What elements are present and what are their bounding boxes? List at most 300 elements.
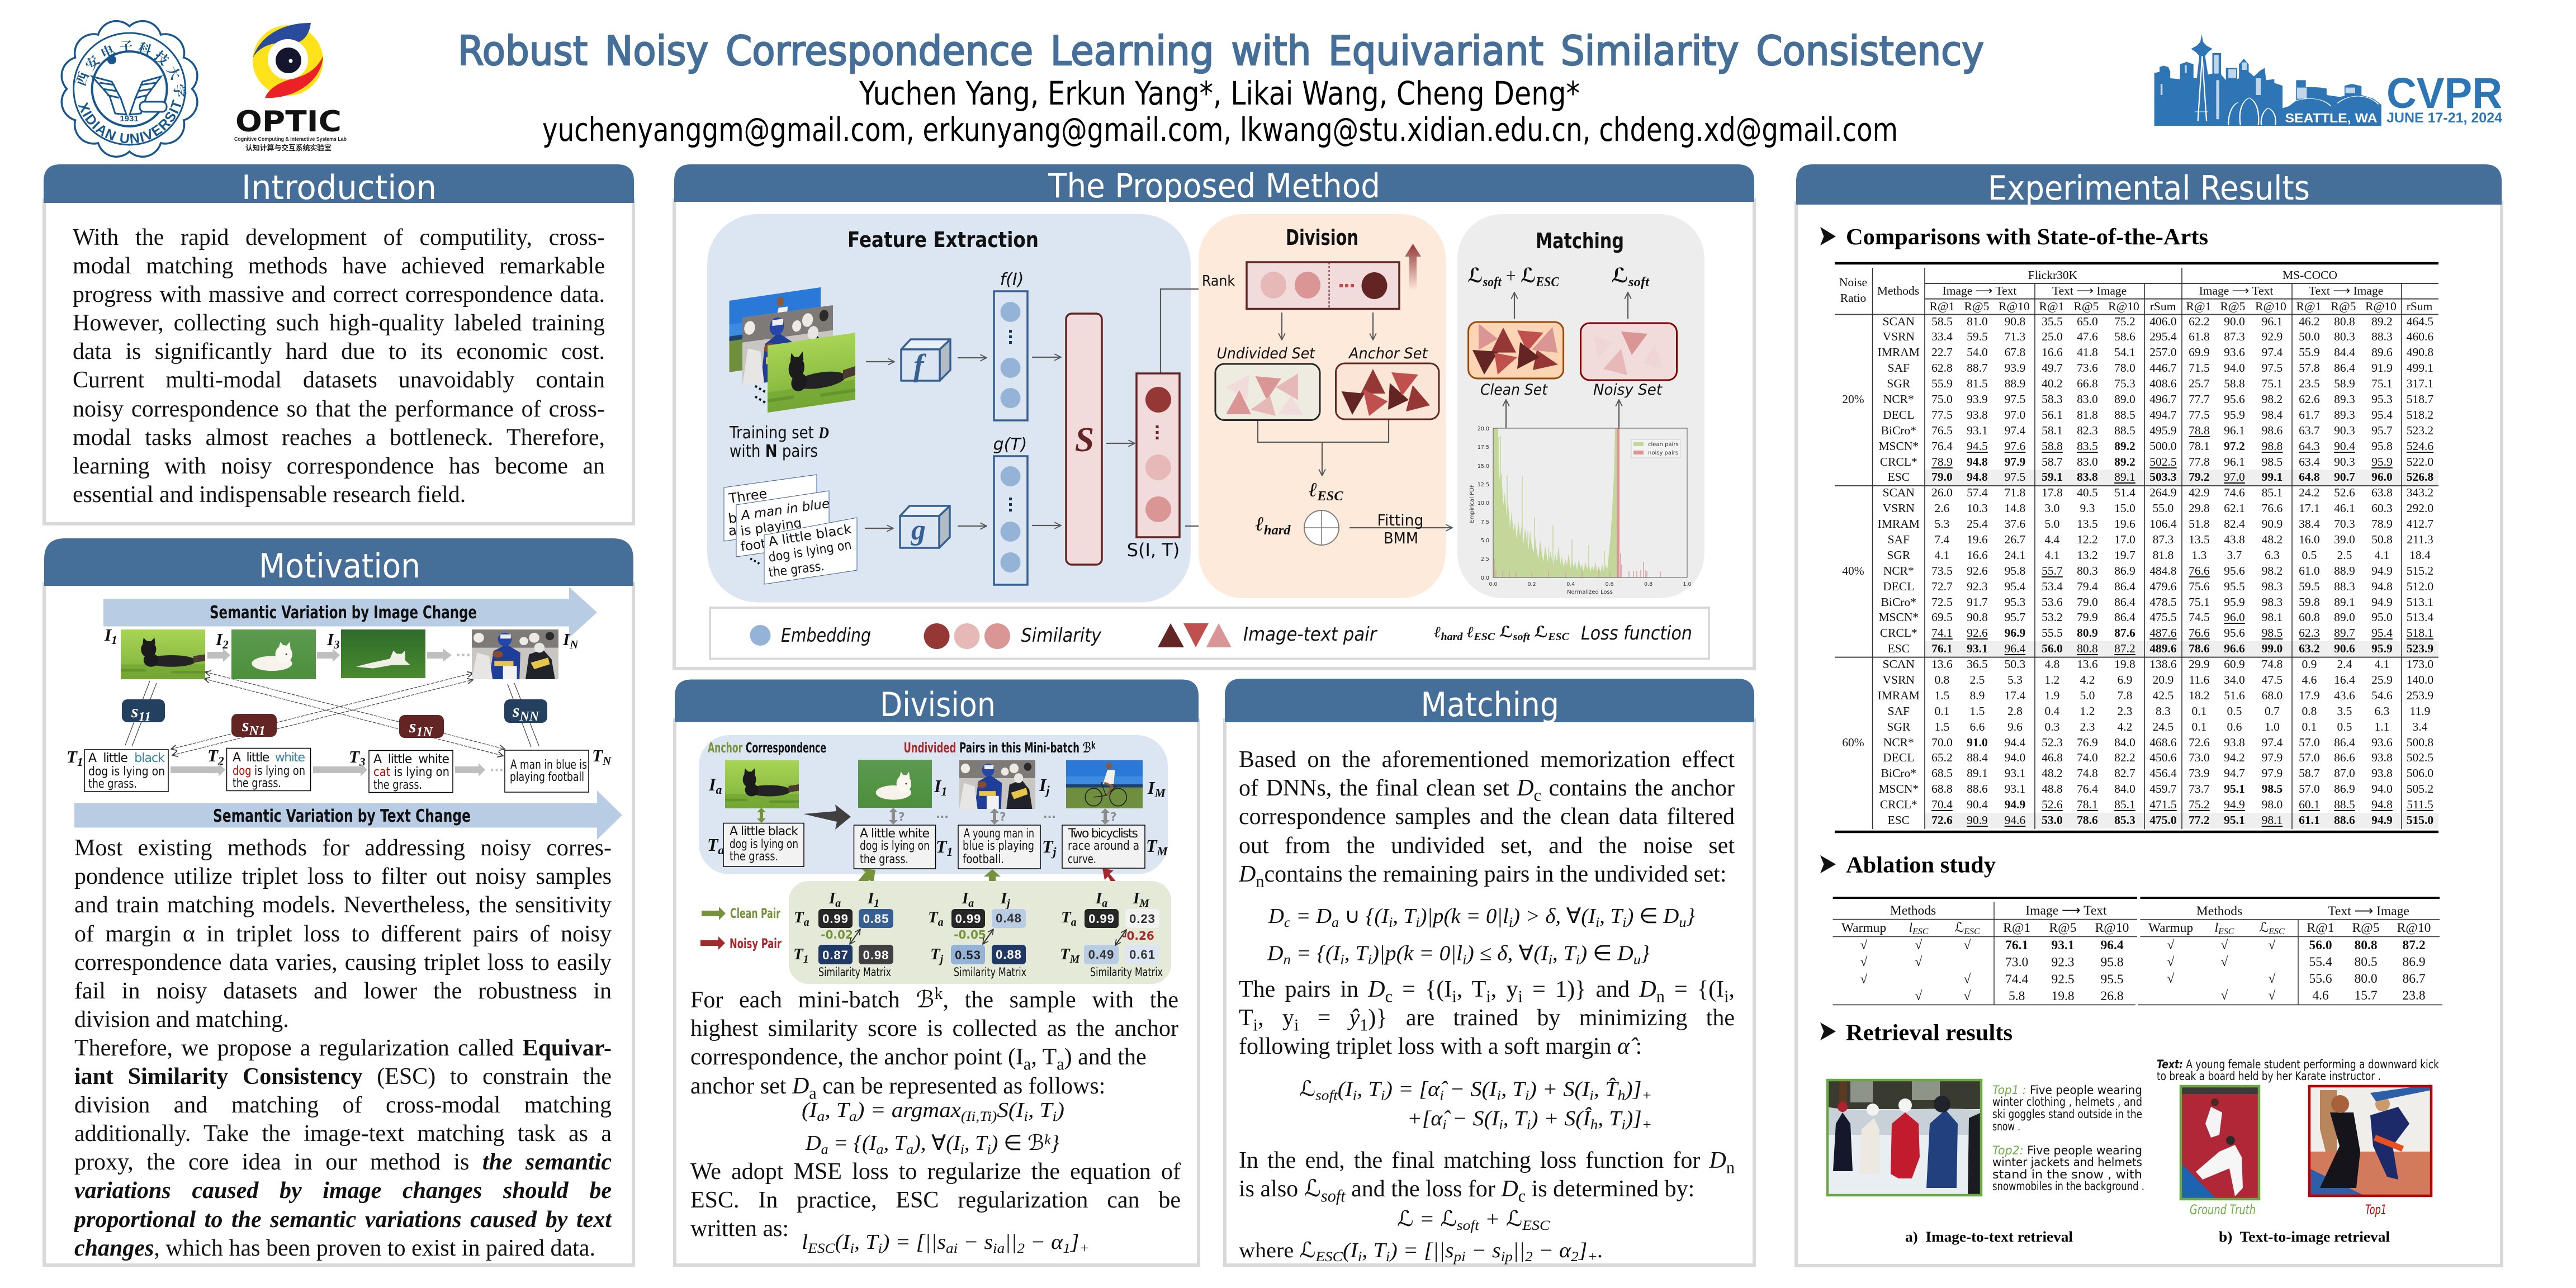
- table: comparison with state of the art: 95.9: [2371, 642, 2393, 655]
- table: ablation study: 19.8: [2051, 989, 2075, 1003]
- equation: anchor point: (Ia, Ta) = argmax (Ii,Ti)S(Ii, Ti): [802, 1098, 1064, 1124]
- table: comparison with state of the art: 93.6: [2371, 736, 2393, 749]
- table: comparison with state of the art: 60.8: [2299, 610, 2320, 624]
- table: comparison with state of the art: 518.1: [2407, 626, 2433, 640]
- table: comparison with state of the art: ESC: [1888, 642, 1910, 655]
- table: comparison with state of the art: 526.8: [2407, 470, 2433, 484]
- text: introduction body: essential and indispensable research field.: [73, 482, 466, 508]
- table: comparison with state of the art: 18.4: [2409, 548, 2431, 562]
- table: comparison with state of the art: 95.1: [2224, 782, 2245, 795]
- table: ablation study: 86.7: [2402, 972, 2426, 986]
- table: comparison with state of the art: 58.5: [1931, 314, 1953, 328]
- pair labels: T1: [936, 836, 953, 859]
- table: comparison with state of the art: 58.3: [2042, 392, 2063, 406]
- table: comparison with state of the art: 58.8: [2224, 377, 2245, 390]
- table: comparison with state of the art: 0.8: [2302, 704, 2317, 718]
- title: Robust Noisy Correspondence Learning with Equivariant Similarity Consistency: [458, 27, 1984, 74]
- table: ablation study: 80.8: [2354, 938, 2378, 953]
- text: matching body 1: Dncontains the remaining pairs in the undivided set:: [1239, 861, 1726, 891]
- query text: to break a board held by her Karate instructor .: [2157, 1069, 2381, 1083]
- table: comparison with state of the art: 26.7: [2005, 533, 2025, 546]
- table: comparison with state of the art: 76.6: [2262, 501, 2283, 515]
- table: comparison with state of the art: 51.6: [2224, 689, 2245, 702]
- text: division body 1: [690, 986, 1178, 1101]
- table: comparison with state of the art: 92.3: [1967, 580, 1988, 593]
- table: comparison with state of the art: 96.0: [2224, 610, 2245, 624]
- table: comparison with state of the art: 138.6: [2149, 657, 2177, 671]
- table: comparison with state of the art: 98.1: [2262, 813, 2283, 827]
- badges: similarity scores: [122, 699, 547, 740]
- matrix 3: 0.99: [1088, 912, 1115, 926]
- text boxes row: A little white: [373, 752, 449, 766]
- table: comparison with state of the art: 60.3: [2371, 501, 2393, 515]
- table: comparison with state of the art: 90.9: [2262, 517, 2283, 531]
- table: comparison with state of the art: 65.0: [2077, 314, 2098, 328]
- matrix 3: Similarity Matrix: [1090, 965, 1163, 979]
- table: ablation study: 95.8: [2100, 955, 2124, 969]
- table: comparison with state of the art: 94.4: [2005, 736, 2025, 749]
- arrow: semantic variation by text change: Semantic Variation by Text Change: [213, 806, 471, 826]
- table: comparison with state of the art: 97.4: [2262, 345, 2283, 359]
- table: comparison with state of the art: 97.9: [2005, 455, 2025, 468]
- table: comparison with state of the art: 8.9: [1970, 689, 1985, 702]
- table: comparison with state of the art: 93.8: [2371, 766, 2393, 780]
- table: comparison with state of the art: 65.2: [1931, 751, 1953, 764]
- table: comparison with state of the art: 496.7: [2149, 392, 2177, 406]
- table: comparison with state of the art: CRCL*: [1880, 626, 1917, 640]
- table: comparison with state of the art: 76.5: [1931, 424, 1953, 437]
- captions: top retrieved texts: Top1 : Five people wearing: [1992, 1083, 2142, 1097]
- sub-panel: Division: Anchor Set: [1348, 345, 1428, 362]
- table: comparison with state of the art: 78.0: [2114, 361, 2135, 375]
- table: ablation study: 92.3: [2051, 955, 2075, 969]
- captions: top retrieved texts: ski goggles stand outside in the: [1992, 1107, 2142, 1121]
- sub-panel: Division: Rank: [1202, 273, 1235, 290]
- table: comparison with state of the art: 97.6: [2005, 439, 2025, 453]
- table: comparison with state of the art: DECL: [1883, 751, 1914, 764]
- table: comparison with state of the art: 74.1: [1931, 626, 1953, 640]
- caption boxes: [723, 823, 1145, 869]
- text boxes row: the grass.: [233, 776, 281, 790]
- text boxes row: T3: [349, 747, 365, 769]
- table: comparison with state of the art: 446.7: [2149, 361, 2177, 375]
- table: comparison with state of the art: 6.3: [2375, 704, 2389, 718]
- matrix 2: -0.05: [954, 928, 986, 941]
- table: comparison with state of the art: 81.0: [1967, 314, 1988, 328]
- arrow: anchor to undivided: [803, 804, 851, 830]
- encoder: g: [900, 506, 950, 548]
- table: comparison with state of the art: 5.3: [1935, 517, 1949, 531]
- table: comparison with state of the art: 523.2: [2407, 424, 2433, 437]
- table: comparison with state of the art: 1.1: [2375, 720, 2389, 733]
- table: comparison with state of the art: 78.1: [2189, 439, 2210, 453]
- table: comparison with state of the art: 97.4: [2005, 424, 2025, 437]
- table: comparison with state of the art: 75.6: [2189, 580, 2210, 593]
- table: comparison with state of the art: 79.2: [2189, 470, 2210, 484]
- table: comparison with state of the art: 95.9: [2224, 408, 2245, 422]
- table: comparison with state of the art: SAF: [1888, 361, 1910, 375]
- table: comparison with state of the art: 97.5: [2262, 361, 2283, 375]
- text stack: training captions: the grass.: [768, 559, 825, 580]
- table: comparison with state of the art: 412.7: [2407, 517, 2433, 531]
- table: comparison with state of the art: 62.2: [2189, 314, 2210, 328]
- table: comparison with state of the art: 81.5: [1967, 377, 1988, 390]
- table: ablation study: 80.5: [2354, 955, 2378, 969]
- captions: top retrieved texts: stand in the snow , with: [1992, 1168, 2142, 1181]
- chart: loss histogram: 0.0: [1481, 575, 1489, 581]
- matrix 1: [793, 889, 893, 979]
- table: comparison with state of the art: 3.5: [2337, 704, 2352, 718]
- table: comparison with state of the art: 499.1: [2407, 361, 2433, 375]
- table: comparison with state of the art: Text ⟶ Image: [2052, 284, 2127, 297]
- table: comparison with state of the art: VSRN: [1883, 501, 1915, 515]
- table: comparison with state of the art: 98.2: [2262, 564, 2283, 577]
- table: comparison with state of the art: 62.1: [2224, 501, 2245, 515]
- chart: loss histogram: 0.4: [1566, 581, 1575, 588]
- chart: loss histogram: 20.0: [1478, 426, 1489, 432]
- matrix 2: Similarity Matrix: [954, 965, 1026, 979]
- text boxes row: playing football: [510, 770, 584, 784]
- text: matching body 2: [1239, 976, 1735, 1063]
- table: ablation study: 86.9: [2402, 955, 2426, 969]
- table: comparison with state of the art: 471.5: [2149, 798, 2177, 811]
- table: comparison with state of the art: 95.5: [2224, 580, 2245, 593]
- table: comparison with state of the art: 83.8: [2077, 470, 2098, 484]
- table: comparison with state of the art: 43.6: [2334, 689, 2355, 702]
- table: comparison with state of the art: 29.9: [2189, 657, 2210, 671]
- table: comparison with state of the art: 96.9: [2005, 626, 2025, 640]
- matrix 2: Tj: [930, 945, 944, 965]
- captions: top retrieved texts: winter clothing , helmets , and: [1992, 1095, 2142, 1109]
- table: ablation study: √: [1860, 972, 1868, 987]
- table: comparison with state of the art: 4.4: [2045, 533, 2059, 546]
- table: comparison with state of the art: 89.0: [2334, 610, 2355, 624]
- table: comparison with state of the art: 86.4: [2114, 610, 2135, 624]
- table: comparison with state of the art: DECL: [1883, 408, 1914, 422]
- table: ablation study: R@5: [2049, 921, 2077, 935]
- table: comparison with state of the art: 86.4: [2334, 361, 2355, 375]
- table: comparison with state of the art: 71.5: [2189, 361, 2210, 375]
- table: comparison with state of the art: 91.9: [2371, 361, 2393, 375]
- embedding column: f(I): f(I): [1000, 270, 1024, 290]
- table: comparison with state of the art: 15.0: [2114, 501, 2135, 515]
- table: comparison with state of the art: 86.9: [2334, 782, 2355, 795]
- table: comparison with state of the art: 515.0: [2407, 813, 2433, 827]
- table: comparison with state of the art: 460.6: [2407, 330, 2433, 343]
- table: comparison with state of the art: 10.3: [1967, 501, 1988, 515]
- table: comparison with state of the art: 524.6: [2407, 439, 2433, 453]
- table: ablation study: Warmup: [1841, 921, 1886, 935]
- image row: I3: [326, 629, 340, 651]
- table: comparison with state of the art: [1835, 263, 2438, 832]
- text: introduction body: noisy correspondence so that the performance of cross-: [73, 396, 605, 422]
- heading: Introduction: Introduction: [242, 168, 437, 207]
- chart: loss histogram: Normalized Loss: [1567, 589, 1613, 595]
- table: comparison with state of the art: 75.2: [2114, 314, 2135, 328]
- table: comparison with state of the art: 33.4: [1931, 330, 1953, 343]
- table: comparison with state of the art: 57.8: [2299, 361, 2320, 375]
- photo: ground truth: Ground Truth: [2190, 1202, 2256, 1218]
- table: comparison with state of the art: 72.7: [1931, 580, 1953, 593]
- table: ablation study: 23.8: [2402, 988, 2426, 1003]
- text: matching body 1: of DNNs, the final clean set Dc contains the anchor: [1239, 775, 1735, 805]
- legend: loss function: ℓhard ℓESC ℒsoft ℒESC: [1433, 624, 1569, 643]
- pair labels: Tj: [1042, 836, 1057, 859]
- sub-panel: Division: BMM: [1384, 529, 1418, 547]
- table: comparison with state of the art: 52.3: [2042, 736, 2063, 749]
- table: comparison with state of the art: 98.3: [2262, 580, 2283, 593]
- text: introduction body: However, collecting such high-quality labeled training: [73, 310, 605, 336]
- legend: loss function: [1433, 622, 1692, 645]
- table: comparison with state of the art: 22.7: [1931, 345, 1953, 359]
- table: comparison with state of the art: 88.7: [1967, 361, 1988, 375]
- matrix 1: 0.98: [863, 948, 889, 962]
- table: comparison with state of the art: R@10: [2108, 300, 2139, 313]
- table: comparison with state of the art: 264.9: [2149, 486, 2177, 499]
- table: ablation study: √: [2269, 988, 2276, 1003]
- table: comparison with state of the art: 78.8: [2189, 424, 2210, 437]
- table: ablation study: √: [2167, 972, 2175, 986]
- text boxes row: the grass.: [373, 778, 422, 792]
- caption boxes: race around a: [1068, 839, 1139, 853]
- table: comparison with state of the art: 57.0: [2299, 751, 2320, 764]
- matrix 1: I1: [867, 889, 879, 910]
- table: comparison with state of the art: 18.2: [2189, 689, 2210, 702]
- table: ablation study: √: [1964, 989, 1971, 1003]
- table: comparison with state of the art: 98.4: [2262, 408, 2283, 422]
- matrix 2: 0.99: [955, 912, 981, 926]
- table: comparison with state of the art: 95.6: [2224, 626, 2245, 640]
- legend: embedding: Embedding: [781, 624, 871, 647]
- logo: Xidian University: 1931: [120, 114, 139, 124]
- table: comparison with state of the art: 95.4: [2371, 626, 2393, 640]
- table: ablation study: lESC: [1909, 921, 1929, 936]
- text: matching body 1: Based on the aforementioned memorization effect: [1239, 747, 1735, 773]
- table: comparison with state of the art: 489.6: [2149, 642, 2177, 655]
- table: comparison with state of the art: 92.9: [2262, 330, 2283, 343]
- image stack: training images: ···: [750, 380, 769, 399]
- table: comparison with state of the art: 16.0: [2299, 533, 2320, 546]
- equation: anchor set: Da = {(Ia, Ta), ∀(Ii, Ti) ∈ ℬk}: [805, 1131, 1059, 1157]
- equation: clean set: Dc = Da ∪ {(Ii, Ti)|p(k = 0|li) > δ, ∀(Ii, Ti) ∈ Du}: [1268, 905, 1695, 930]
- table: comparison with state of the art: 80.3: [2077, 564, 2098, 577]
- table: comparison with state of the art: R@1: [2186, 300, 2211, 313]
- table: comparison with state of the art: 48.2: [2262, 533, 2283, 546]
- table: comparison with state of the art: 89.7: [2334, 626, 2355, 640]
- table: comparison with state of the art: R@1: [1930, 300, 1954, 313]
- table: comparison with state of the art: 257.0: [2149, 345, 2177, 359]
- table: comparison with state of the art: 68.0: [2262, 689, 2283, 702]
- table: comparison with state of the art: 57.0: [2299, 782, 2320, 795]
- table: comparison with state of the art: 55.7: [2042, 564, 2063, 577]
- table: comparison with state of the art: 94.8: [2371, 580, 2393, 593]
- table: comparison with state of the art: 92.6: [1967, 626, 1988, 640]
- table: ablation study: √: [2167, 955, 2175, 969]
- table: comparison with state of the art: 93.9: [2005, 361, 2025, 375]
- captions: top retrieved texts: Top2: Five people wearing: [1992, 1144, 2142, 1157]
- table: comparison with state of the art: 88.3: [2334, 580, 2355, 593]
- table: comparison with state of the art: 79.0: [1931, 470, 1953, 484]
- table: comparison with state of the art: 98.1: [2262, 610, 2283, 624]
- table: comparison with state of the art: Image ⟶ Text: [2199, 284, 2273, 297]
- table: ablation study: Methods: [2196, 904, 2242, 918]
- encoder: f: [901, 339, 950, 383]
- table: comparison with state of the art: 11.9: [2410, 704, 2430, 718]
- diagram: anchor and undivided pairs: Undivided Pairs in this Mini-batch ℬk: [903, 740, 1096, 756]
- table: comparison with state of the art: 513.4: [2407, 610, 2433, 624]
- table: ablation study: √: [2269, 938, 2276, 953]
- table: comparison with state of the art: 86.6: [2334, 751, 2355, 764]
- table: comparison with state of the art: 59.1: [2042, 470, 2063, 484]
- table: ablation study: √: [1915, 938, 1922, 953]
- table: comparison with state of the art: 62.6: [2299, 392, 2320, 406]
- table: comparison with state of the art: 46.2: [2299, 314, 2320, 328]
- table: ablation study: √: [1964, 938, 1971, 953]
- table: comparison with state of the art: 77.5: [1931, 408, 1953, 422]
- diagram: similarity matrices: [789, 881, 1171, 984]
- table: comparison with state of the art: 89.2: [2371, 314, 2393, 328]
- pair labels: [707, 774, 1168, 859]
- table: comparison with state of the art: 60.1: [2299, 798, 2320, 811]
- table: comparison with state of the art: 20%: [1842, 392, 1864, 406]
- table: comparison with state of the art: 54.1: [2114, 345, 2135, 359]
- table: comparison with state of the art: 75.1: [2189, 595, 2210, 609]
- table: comparison with state of the art: 82.3: [2077, 424, 2098, 437]
- caption boxes: A little white: [860, 827, 930, 841]
- table: comparison with state of the art: 50.3: [2005, 657, 2025, 671]
- table: comparison with state of the art: 513.1: [2407, 595, 2433, 609]
- table: comparison with state of the art: CRCL*: [1880, 798, 1917, 811]
- legend: similarity: [924, 623, 1102, 649]
- text: introduction body: modal tasks almost reaches a bottleneck. Therefore,: [73, 425, 605, 451]
- text: introduction body: data is significantly hard due to its economic cost.: [73, 339, 605, 364]
- text boxes row: the grass.: [88, 777, 137, 791]
- table: comparison with state of the art: 63.2: [2299, 642, 2320, 655]
- panel: Experimental Results: [1796, 164, 2502, 1266]
- noisy set: [1581, 323, 1677, 399]
- table: comparison with state of the art: 80.8: [2334, 314, 2355, 328]
- table: comparison with state of the art: 77.7: [2189, 392, 2210, 406]
- table: comparison with state of the art: 87.2: [2114, 642, 2135, 655]
- table: comparison with state of the art: 502.5: [2149, 455, 2177, 468]
- table: comparison with state of the art: 5.0: [2045, 517, 2059, 531]
- caption: text-to-image: b) Text-to-image retrieval: [2219, 1229, 2390, 1245]
- table: comparison with state of the art: 62.8: [1931, 361, 1953, 375]
- table: comparison with state of the art: 88.5: [2334, 798, 2355, 811]
- table: comparison with state of the art: IMRAM: [1878, 517, 1920, 531]
- table: comparison with state of the art: 96.1: [2224, 424, 2245, 437]
- table: comparison with state of the art: 76.4: [1931, 439, 1953, 453]
- table: comparison with state of the art: 98.2: [2262, 392, 2283, 406]
- badges: similarity scores: s1N: [409, 716, 433, 740]
- table: comparison with state of the art: Ratio: [1840, 291, 1866, 305]
- caption boxes: A young man in: [964, 827, 1034, 841]
- text: motivation body: fail in noisy datasets and lower the robustness in: [74, 978, 612, 1004]
- table: comparison with state of the art: 74.5: [2189, 610, 2210, 624]
- table: comparison with state of the art: 13.2: [2077, 548, 2098, 562]
- table: comparison with state of the art: 50.8: [2371, 533, 2393, 546]
- arrow: semantic variation by image change: [103, 587, 597, 638]
- table: comparison with state of the art: 60%: [1842, 736, 1864, 749]
- text boxes row: T2: [207, 746, 224, 768]
- table: comparison with state of the art: R@5: [1964, 300, 1989, 313]
- table: comparison with state of the art: SCAN: [1883, 314, 1915, 328]
- image row: IN: [562, 629, 579, 651]
- table: ablation study: R@1: [2003, 921, 2030, 935]
- table: ablation study: R@1: [2307, 921, 2334, 935]
- caption boxes: Two bicyclists: [1068, 827, 1138, 841]
- image row: I2: [215, 629, 229, 651]
- table: comparison with state of the art: 76.9: [2077, 736, 2098, 749]
- table: comparison with state of the art: 343.2: [2407, 486, 2433, 499]
- table: comparison with state of the art: 47.5: [2262, 673, 2283, 686]
- table: comparison with state of the art: 518.2: [2407, 408, 2433, 422]
- matrix 1: Ia: [828, 889, 841, 910]
- table: comparison with state of the art: 0.5: [2227, 704, 2242, 718]
- table: comparison with state of the art: 29.8: [2189, 501, 2210, 515]
- arrow: semantic variation by text change: [74, 790, 622, 840]
- table: ablation study: 73.0: [2005, 955, 2028, 969]
- table: comparison with state of the art: 89.2: [2114, 439, 2135, 453]
- table: comparison with state of the art: 88.5: [2114, 424, 2135, 437]
- legend: clean and noisy pair: Noisy Pair: [730, 936, 782, 951]
- text boxes row: T1: [67, 747, 83, 769]
- table: comparison with state of the art: 95.0: [2371, 610, 2393, 624]
- chart: loss histogram: 0.8: [1644, 581, 1652, 588]
- caption boxes: dog is lying on: [730, 837, 798, 851]
- table: comparison with state of the art: 89.6: [2371, 345, 2393, 359]
- table: comparison with state of the art: 85.1: [2114, 798, 2135, 811]
- logo: OPTIC lab: [234, 23, 347, 152]
- text stack: training captions: foot: [740, 537, 767, 555]
- table: comparison with state of the art: 56.0: [2042, 642, 2063, 655]
- table: comparison with state of the art: 85.1: [2262, 486, 2283, 499]
- chart: loss histogram: 12.5: [1478, 482, 1489, 488]
- text: matching body 1: [1239, 746, 1735, 891]
- sub-panel: Feature Extraction: Training set D: [729, 423, 829, 443]
- sub-panel: Feature Extraction: Feature Extraction: [847, 228, 1039, 252]
- embedding column: f(I): [994, 270, 1027, 420]
- table: comparison with state of the art: Methods: [1877, 284, 1919, 297]
- text: matching body 3: In the end, the final matching loss function for Dn: [1239, 1148, 1735, 1177]
- table: comparison with state of the art: 78.9: [2371, 517, 2393, 531]
- table: comparison with state of the art: 73.7: [2189, 782, 2210, 795]
- image row: ···: [456, 647, 471, 663]
- table: comparison with state of the art: 487.6: [2149, 626, 2177, 640]
- table: comparison with state of the art: 63.8: [2371, 486, 2393, 499]
- table: comparison with state of the art: 99.0: [2262, 642, 2283, 655]
- table: comparison with state of the art: MSCN*: [1878, 439, 1919, 453]
- arrow: semantic variation by image change: Semantic Variation by Image Change: [210, 603, 477, 623]
- text: motivation body: Most existing methods for addressing noisy corres-: [74, 835, 612, 861]
- table: ablation study: Methods: [1890, 903, 1936, 918]
- sub-panel: Division: Division: [1286, 225, 1358, 250]
- table: comparison with state of the art: 24.5: [2153, 720, 2174, 733]
- legend: image-text pair: [1158, 623, 1377, 647]
- text: motivation body: division and matching.: [74, 1007, 289, 1033]
- table: ablation study: Text ⟶ Image: [2328, 904, 2409, 918]
- table: comparison with state of the art: 97.9: [2262, 766, 2283, 780]
- table: comparison with state of the art: 4.1: [2375, 657, 2389, 671]
- table: ablation study: 87.2: [2402, 938, 2426, 953]
- text: motivation body: proportional to the semantic variations caused by text: [74, 1207, 612, 1233]
- table: comparison with state of the art: 253.9: [2407, 689, 2433, 702]
- table: comparison with state of the art: 97.9: [2262, 751, 2283, 764]
- arrows: feature extraction flow: [865, 289, 1247, 528]
- table: comparison with state of the art: 78.6: [2189, 642, 2210, 655]
- table: comparison with state of the art: 42.5: [2153, 689, 2174, 702]
- table: comparison with state of the art: rSum: [2407, 300, 2433, 313]
